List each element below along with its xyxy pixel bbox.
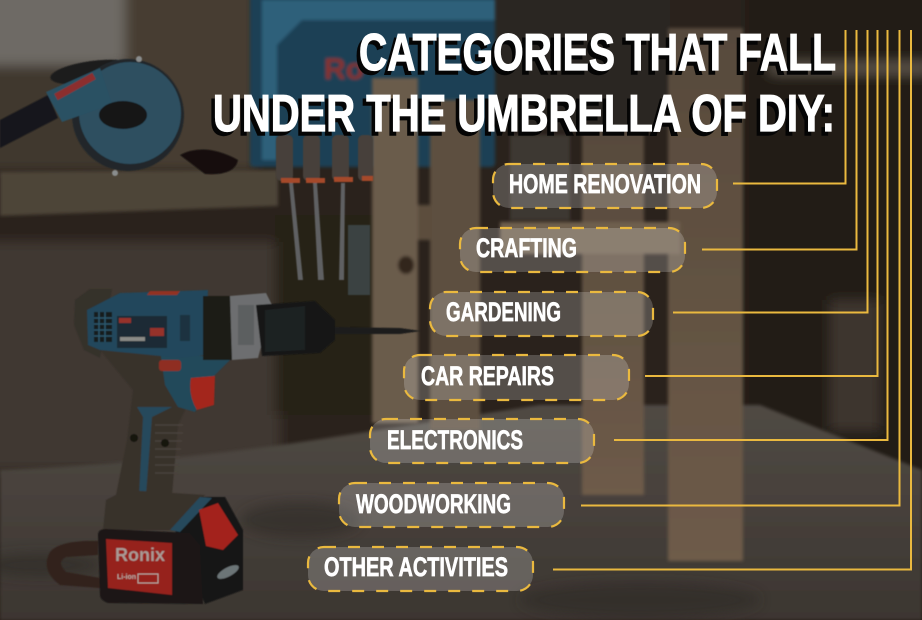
gearbox — [203, 296, 233, 360]
category: woodworking: WOODWORKING — [356, 489, 511, 519]
category: woodworking — [339, 483, 564, 527]
category: gardening — [430, 292, 653, 336]
blower tool — [0, 55, 238, 176]
connector: gardening — [673, 30, 868, 312]
category: other activities — [308, 547, 533, 591]
rear cap — [74, 289, 112, 358]
connector lines — [553, 30, 911, 570]
category: electronics: ELECTRONICS — [387, 425, 523, 455]
category: other activities: OTHER ACTIVITIES — [324, 552, 508, 582]
connector: home renovation — [733, 30, 846, 184]
drill bit — [333, 327, 421, 334]
drill: Li-ion — [117, 574, 136, 581]
connector: car repairs — [645, 30, 878, 376]
handle — [100, 350, 190, 500]
category: crafting: CRAFTING — [476, 233, 577, 263]
category: car repairs: CAR REPAIRS — [421, 361, 554, 391]
strap — [47, 541, 100, 588]
blue storage box: Ro — [324, 53, 364, 86]
category: car repairs — [404, 355, 629, 400]
connector: electronics — [614, 30, 888, 440]
chuck — [256, 301, 335, 356]
silver collar — [230, 293, 272, 360]
wooden frame — [372, 28, 743, 561]
connector: crafting — [702, 30, 856, 250]
main housing — [87, 290, 208, 358]
category: gardening: GARDENING — [446, 297, 561, 327]
category: home renovation: HOME RENOVATION — [509, 169, 701, 199]
blue lower housing and trigger — [160, 350, 230, 412]
shelf — [0, 170, 278, 216]
category: crafting — [460, 228, 685, 272]
drill: Ronix — [115, 545, 165, 565]
category: home renovation — [493, 164, 717, 208]
connector: woodworking — [581, 30, 900, 506]
blue storage box — [250, 0, 495, 167]
screwdrivers — [276, 135, 373, 295]
battery — [103, 490, 205, 530]
workbench table — [0, 405, 922, 620]
title — [210, 24, 836, 147]
connector: other activities — [553, 30, 911, 570]
category: electronics — [370, 419, 594, 463]
drill — [47, 289, 421, 604]
